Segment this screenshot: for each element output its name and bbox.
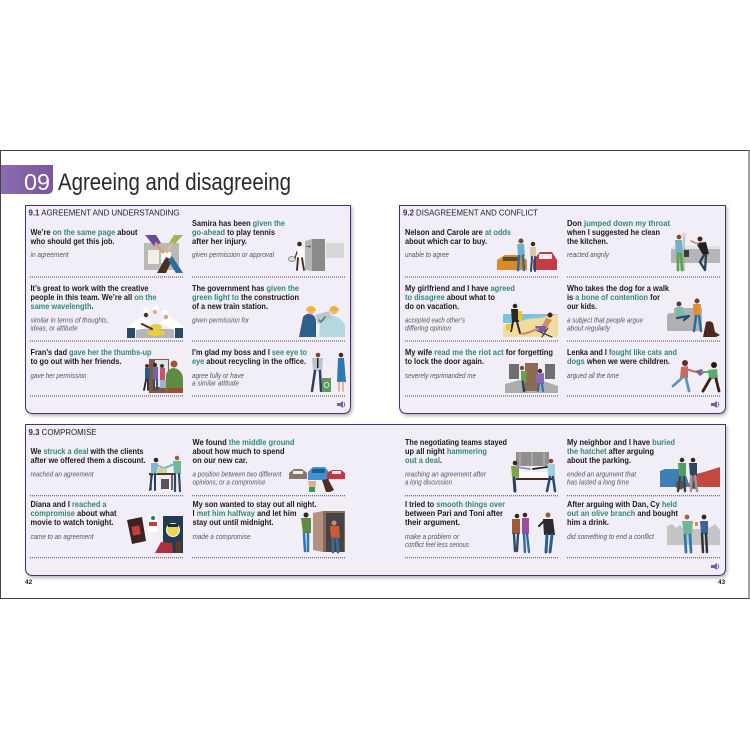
icon: argument in kitchen	[671, 232, 720, 271]
icon: chefs around a table	[127, 305, 183, 338]
entry: held out an olive branch: After arguing with Dan, Cy held	[567, 499, 677, 509]
entry: the middle ground: We found the middle ground	[192, 437, 294, 447]
heading 9.2: 9.2 DISAGREEMENT AND CONFLICT	[403, 208, 539, 218]
entry: reached a compromise	[30, 499, 183, 558]
entry: met him halfway: I met him halfway and let him	[192, 508, 296, 518]
icon: children fighting over toy	[673, 360, 719, 391]
icon: hands on board	[144, 235, 183, 273]
entry: at odds: unable to agree	[405, 250, 449, 259]
panel: 9.3 compromise	[26, 424, 726, 576]
entry: hammering out a deal: a long discussion	[405, 478, 452, 487]
entry: a bone of contention: our kids.	[567, 301, 597, 311]
entry: read me the riot act: My wife read me the riot act for forgetting	[405, 347, 553, 357]
entry: on the same page: in agreement	[30, 250, 69, 259]
icon: movie posters	[127, 515, 183, 553]
entry: reached a compromise: came to an agreement	[30, 532, 94, 541]
entry: at odds: about which car to buy.	[405, 236, 487, 246]
icon: diver and sunbather on beach	[503, 304, 558, 337]
entry: smooth things over: conflict feel less serious	[405, 540, 469, 549]
entry: a bone of contention: a subject that people argue	[567, 316, 643, 324]
title: Agreeing and disagreeing	[58, 169, 291, 196]
entry: smooth things over: make a problem or	[405, 532, 460, 541]
entry: the middle ground: opinions, or a compromise	[192, 478, 266, 487]
entry: a bone of contention: is a bone of contention for	[567, 292, 661, 302]
entry: agreed to disagree: accepted each other’s	[405, 316, 465, 324]
entry: reached a compromise: compromise about what	[30, 508, 117, 518]
entry: fought like cats and dogs: argued all the time	[567, 371, 619, 380]
entry: given the green light to: of a new train station.	[192, 301, 268, 311]
icon: mother and son at doorway	[301, 511, 345, 552]
entry: met him halfway: stay out until midnight.	[192, 517, 274, 527]
entry: read me the riot act	[405, 347, 558, 396]
entry: held out an olive branch	[567, 499, 720, 558]
entry: hammering out a deal	[405, 437, 558, 496]
icon: speaker	[337, 401, 345, 408]
entry: a bone of contention: Who takes the dog for a walk	[567, 283, 669, 293]
icon: couple between two cars	[497, 238, 557, 271]
heading 9.3: 9.3 COMPROMISE	[28, 427, 97, 437]
entry: the middle ground: about how much to spend	[192, 446, 284, 456]
entry: read me the riot act: severely reprimanded me	[405, 371, 476, 380]
entry: on the same page: We’re on the same page about	[30, 227, 138, 237]
entry: see eye to eye: a similar attitude	[192, 378, 239, 388]
entry: see eye to eye: agree fully or have	[192, 371, 244, 380]
entry: jumped down my throat: when I suggested he clean	[566, 227, 660, 237]
entry: struck a deal: after we offered them a discount.	[30, 455, 146, 465]
heading 9.1: 9.1 AGREEMENT AND UNDERSTANDING	[28, 208, 180, 218]
entry: hammering out a deal: The negotiating teams stayed	[405, 437, 507, 447]
entry: hammering out a deal: reaching an agreement after	[405, 470, 487, 479]
entry: jumped down my throat: the kitchen.	[567, 236, 608, 246]
entry: given the go-ahead: go-ahead to play tennis	[192, 227, 275, 237]
entry: on the same wavelength	[30, 283, 183, 341]
entry: held out an olive branch: him a drink.	[567, 517, 609, 527]
chapter number tab: 09	[24, 169, 50, 195]
entry: gave her the thumbs-up: to go out with her friends.	[30, 356, 122, 366]
entry: given the go-ahead: after her injury.	[192, 236, 247, 246]
panel: 9.2 disagreement and conflict	[400, 206, 726, 414]
entry: hammering out a deal: up all night hammering	[405, 446, 487, 456]
entry: smooth things over: their argument.	[405, 517, 460, 527]
icon: couple at house door	[505, 363, 558, 393]
entry: jumped down my throat: Don jumped down my throat	[567, 218, 670, 228]
entry: at odds: Nelson and Carole are at odds	[405, 227, 511, 237]
entry: buried the hatchet: ended an argument that	[567, 470, 637, 479]
entry: a bone of contention: about regularly	[567, 324, 610, 332]
entry: held out an olive branch: out an olive branch and bought	[567, 508, 678, 518]
entry: gave her the thumbs-up: Fran’s dad gave her the thumbs-up	[30, 347, 152, 357]
entry: given the green light to: given permission for	[192, 316, 250, 324]
icon: tennis player and lockers	[288, 239, 344, 271]
entry: struck a deal	[30, 446, 183, 496]
entry: on the same wavelength: similar in terms of thoughts,	[30, 316, 108, 324]
entry: a bone of contention	[567, 283, 720, 341]
entry: on the same wavelength: It’s great to work with the creative	[30, 283, 149, 293]
icon: speaker	[711, 563, 719, 570]
page number 43: 43	[718, 579, 726, 586]
entry: fought like cats and dogs: dogs when we were children.	[567, 356, 670, 366]
entry: the middle ground: a position between two different	[192, 470, 282, 479]
entry: on the same wavelength: people in this team. We’re all on the	[30, 292, 157, 302]
page number 42: 42	[25, 579, 33, 586]
icon: three people talking	[512, 512, 555, 552]
panel: 9.1 agreement and understanding	[26, 206, 350, 414]
entry: read me the riot act: to lock the door again.	[405, 356, 484, 366]
entry: agreed to disagree: to disagree about what to	[405, 292, 495, 302]
icon: father and daughters in doorway	[144, 359, 183, 393]
entry: given the green light to	[192, 283, 345, 341]
entry: buried the hatchet: has lasted a long time	[567, 478, 629, 487]
entry: agreed to disagree: differing opinion	[405, 324, 451, 332]
entry: fought like cats and dogs	[567, 347, 720, 396]
entry: the middle ground	[192, 437, 345, 496]
page frame	[0, 150, 749, 598]
entry: given the go-ahead: given permission or approval	[192, 250, 274, 259]
entry: gave her the thumbs-up: gave her permission	[30, 371, 86, 380]
icon: couple on sofa with dog	[667, 298, 720, 337]
icon: boss, colleague and recycling bin	[312, 353, 346, 392]
entry: jumped down my throat: reacted angrily	[567, 250, 609, 259]
icon: two engineers with plan	[299, 306, 345, 337]
entry: given the go-ahead: Samira has been given the	[192, 218, 285, 228]
entry: see eye to eye: I’m glad my boss and I see eye to	[192, 347, 307, 357]
entry: buried the hatchet: about the parking.	[567, 455, 631, 465]
entry: at odds	[405, 227, 558, 277]
entry: on the same page: who should get this job.	[30, 236, 114, 246]
entry: reached a compromise: Diana and I reached a	[30, 499, 107, 509]
entry: agreed to disagree: My girlfriend and I have agreed	[405, 283, 515, 293]
entry: buried the hatchet: the hatchet after arguing	[567, 446, 654, 456]
entry: struck a deal: reached an agreement	[30, 470, 94, 479]
entry: smooth things over: I tried to smooth things over	[405, 499, 506, 509]
entry: on the same wavelength: same wavelength.	[30, 301, 94, 311]
icon: three cars and hands	[289, 467, 345, 492]
entry: met him halfway: made a compromise	[192, 532, 250, 541]
entry: see eye to eye: eye about recycling in the office.	[192, 356, 306, 366]
entry: the middle ground: on our new car.	[192, 455, 248, 465]
entry: smooth things over	[405, 499, 558, 558]
icon: speaker	[711, 401, 719, 408]
entry: given the go-ahead	[192, 218, 345, 277]
entry: hammering out a deal: out a deal.	[405, 455, 442, 465]
entry: gave her the thumbs-up	[30, 347, 183, 396]
entry: struck a deal: We struck a deal with the clients	[30, 446, 144, 456]
entry: jumped down my throat	[566, 218, 720, 277]
entry: buried the hatchet: My neighbor and I have buried	[567, 437, 675, 447]
icon: neighbours shaking hands between cars	[660, 458, 720, 491]
entry: on the same wavelength: ideas, or attitude	[30, 324, 78, 332]
entry: met him halfway: My son wanted to stay out all night.	[192, 499, 316, 509]
entry: smooth things over: between Pari and Toni after	[405, 508, 504, 518]
icon: handshake over desk	[149, 456, 181, 491]
icon: negotiators at table	[511, 452, 555, 491]
chapter number tab	[1, 165, 53, 195]
entry: agreed to disagree: do on vacation.	[405, 301, 459, 311]
entry: on the same page	[30, 227, 183, 277]
entry: see eye to eye	[192, 347, 345, 396]
entry: fought like cats and dogs: Lenka and I fought like cats and	[567, 347, 677, 357]
entry: agreed to disagree	[405, 283, 558, 341]
entry: buried the hatchet	[567, 437, 720, 496]
entry: held out an olive branch: did something to end a conflict	[567, 532, 655, 541]
entry: given the green light to: The government has given the	[192, 283, 299, 293]
entry: met him halfway	[192, 499, 345, 558]
icon: two men with drinks in a crowd	[667, 515, 720, 552]
entry: given the green light to: green light to the construction	[192, 292, 299, 302]
entry: reached a compromise: movie to watch tonight.	[30, 517, 114, 527]
